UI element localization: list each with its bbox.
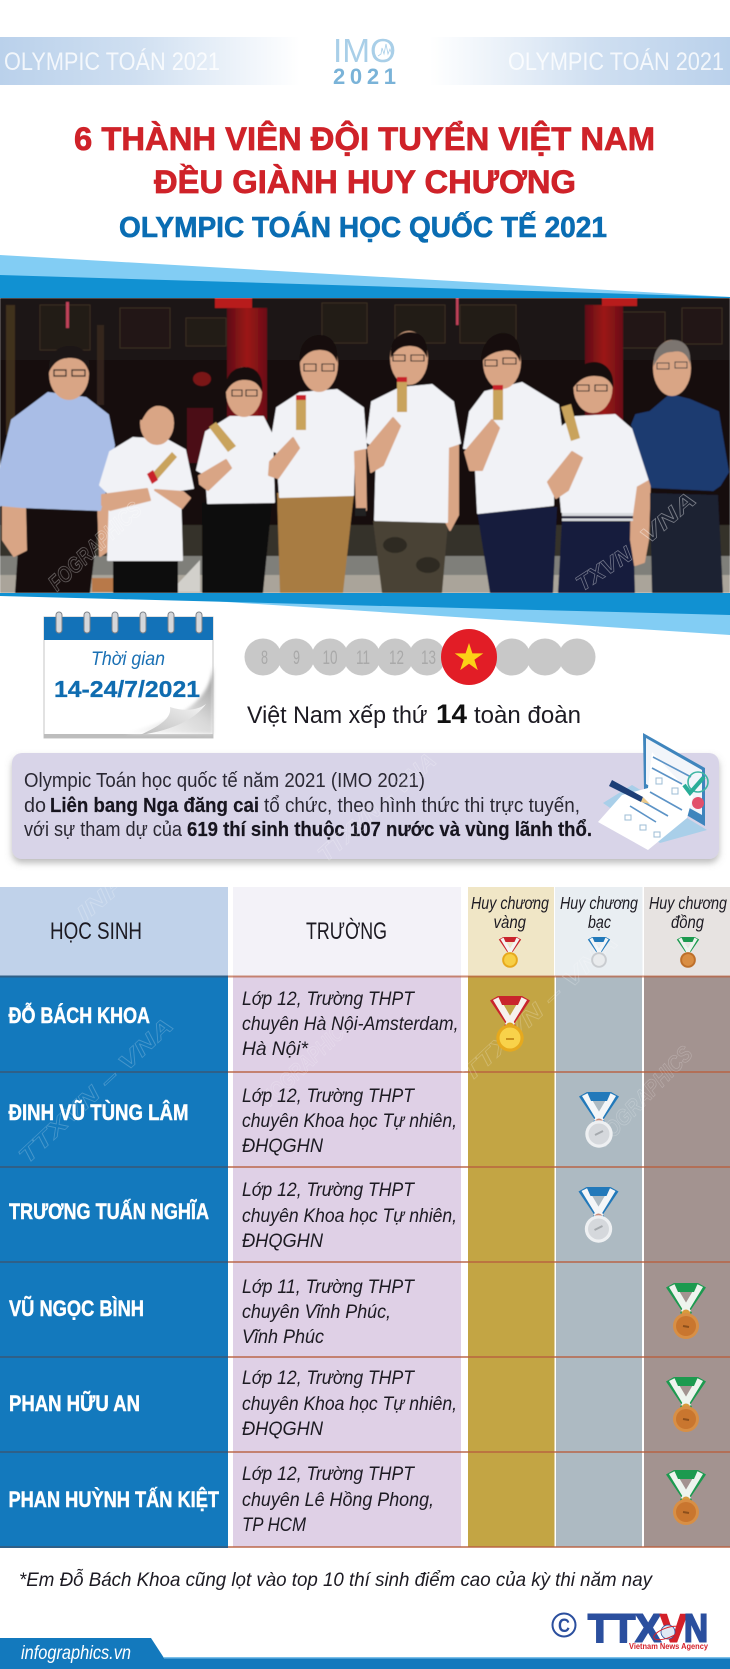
ranking statement: toàn đoàn — [474, 702, 581, 729]
person 8: man in navy shirt — [632, 340, 728, 593]
footer bar — [0, 1638, 730, 1669]
row 5: Phan Hữu An: chuyên Khoa học Tự nhiên, — [242, 1393, 457, 1415]
icon: gold medal — [490, 996, 530, 1052]
person 2: girl with bookmark — [100, 393, 193, 593]
row 3: Trương Tuấn Nghĩa — [9, 1179, 618, 1252]
TTXVN logo: V — [660, 1607, 687, 1651]
column heading: gold medal: Huy chương — [471, 893, 549, 913]
row 2: Đinh Vũ Tùng Lâm: ĐHQGHN — [242, 1135, 324, 1157]
row 4: Vũ Ngọc Bình: chuyên Vĩnh Phúc, — [242, 1301, 391, 1323]
photo watermarks: TXVN — [571, 541, 638, 596]
table watermarks: INF — [71, 871, 130, 927]
panel text: với sự tham dự của — [24, 819, 183, 841]
bottom wave — [0, 593, 730, 635]
ranking circles: 8 — [261, 648, 268, 669]
table watermarks: FOGRAPHICS — [591, 1041, 698, 1150]
icon: Vietnam flag circle — [441, 629, 497, 685]
row 1: Đỗ Bách Khoa: ĐỖ BÁCH KHOA — [8, 1002, 150, 1028]
panel text: Olympic Toán học quốc tế năm 2021 (IMO 2021) — [24, 770, 425, 792]
column heading: bronze medal — [649, 893, 727, 968]
row 4: Vũ Ngọc Bình: Lớp 11, Trường THPT — [242, 1276, 416, 1298]
row 2: Đinh Vũ Tùng Lâm: Lớp 12, Trường THPT — [242, 1085, 416, 1107]
icon: bronze medal — [666, 1377, 706, 1432]
calendar — [44, 612, 213, 738]
table watermarks — [13, 871, 698, 1169]
photo watermarks — [48, 494, 697, 592]
ranking statement — [247, 699, 581, 729]
top wave — [0, 255, 730, 298]
column heading: gold medal: vàng — [494, 912, 526, 932]
row 6: Phan Huỳnh Tấn Kiệt: TP HCM — [242, 1514, 307, 1536]
row 5: Phan Hữu An: ĐHQGHN — [242, 1418, 324, 1440]
photo background: temple — [0, 298, 730, 593]
icon: bronze medal — [666, 1283, 706, 1339]
person 1: man in light blue shirt — [0, 346, 114, 593]
panel text: Liên bang Nga đăng cai — [50, 795, 259, 817]
icon: bronze medal — [666, 1470, 706, 1525]
column heading: bronze medal: đồng — [671, 912, 704, 932]
ranking statement: 14 — [436, 699, 467, 729]
row 6: Phan Huỳnh Tấn Kiệt: PHAN HUỲNH TẤN KIỆT — [8, 1487, 219, 1512]
row 1: Đỗ Bách Khoa — [8, 988, 530, 1060]
IMO 2021 logo — [333, 32, 396, 89]
column heading: silver medal — [560, 893, 638, 968]
results table — [0, 871, 730, 1548]
title — [74, 121, 655, 244]
row 4: Vũ Ngọc Bình: Vĩnh Phúc — [242, 1326, 324, 1348]
table row rules — [0, 976, 730, 1548]
person 5: boy with camouflage trousers — [367, 332, 460, 593]
title: ĐỀU GIÀNH HUY CHƯƠNG — [154, 164, 576, 200]
row 5: Phan Hữu An: PHAN HỮU AN — [9, 1391, 140, 1416]
title: OLYMPIC TOÁN HỌC QUỐC TẾ 2021 — [119, 211, 607, 244]
row 3: Trương Tuấn Nghĩa: TRƯƠNG TUẤN NGHĨA — [9, 1199, 209, 1224]
footnote: *Em Đỗ Bách Khoa cũng lọt vào top 10 thí sinh điểm cao của kỳ thi năm nay — [19, 1568, 653, 1591]
column heading: gold medal — [471, 893, 549, 968]
IMO 2021 logo: IMO — [333, 32, 396, 69]
TTXVN logo: N — [684, 1607, 708, 1651]
table watermarks: FOGRAPHICS — [256, 1012, 358, 1111]
table column backgrounds — [0, 887, 730, 1547]
photo watermarks: FOGRAPHICS — [43, 497, 147, 596]
row 5: Phan Hữu An: Lớp 12, Trường THPT — [242, 1367, 416, 1389]
TTXVN logo — [552, 1607, 710, 1651]
row 3: Trương Tuấn Nghĩa: Lớp 12, Trường THPT — [242, 1179, 416, 1201]
panel watermark: TTXVN – VNA — [313, 748, 441, 867]
person 7: boy with striped belt — [546, 362, 652, 593]
ranking circles: 9 — [293, 648, 300, 669]
photo watermarks: VNA — [635, 487, 701, 549]
footer bar: infographics.vn — [21, 1643, 131, 1664]
icon: online exam laptop — [598, 733, 708, 850]
row 5: Phan Hữu An — [9, 1367, 706, 1440]
info panel — [12, 733, 719, 867]
calendar rings — [56, 612, 202, 633]
table watermarks: TTXVN – VNA — [13, 1013, 178, 1169]
column heading: silver medal: Huy chương — [560, 893, 638, 913]
person 6: boy with navy trousers — [464, 333, 562, 593]
calendar: Thời gian — [91, 649, 165, 670]
ranking circles: 11 — [356, 648, 370, 669]
row 4: Vũ Ngọc Bình: VŨ NGỌC BÌNH — [9, 1296, 144, 1321]
ranking circles — [244, 629, 596, 685]
calendar: 14-24/7/2021 — [54, 676, 200, 702]
row 6: Phan Huỳnh Tấn Kiệt: chuyên Lê Hồng Phong, — [242, 1489, 434, 1511]
table watermarks: TTXVN – VNA — [456, 929, 623, 1087]
top banner: OLYMPIC TOÁN 2021 — [4, 47, 220, 76]
panel text: 619 thí sinh thuộc 107 nước và vùng lãnh thổ. — [187, 819, 592, 841]
person 4: boy with khaki trousers — [269, 335, 366, 593]
ranking circles: 13 — [421, 648, 436, 669]
ranking statement: Việt Nam xếp thứ — [247, 702, 428, 729]
row 3: Trương Tuấn Nghĩa: chuyên Khoa học Tự nhiên, — [242, 1205, 457, 1227]
column heading: schools: TRƯỜNG — [306, 918, 387, 945]
column heading: silver medal: bạc — [588, 912, 611, 932]
row 3: Trương Tuấn Nghĩa: ĐHQGHN — [242, 1230, 324, 1252]
icon: silver medal — [579, 1092, 619, 1148]
TTXVN logo: Vietnam News Agency — [629, 1641, 708, 1651]
panel text — [24, 770, 592, 841]
column heading: students: HỌC SINH — [50, 918, 142, 945]
row 6: Phan Huỳnh Tấn Kiệt — [8, 1463, 706, 1536]
row 4: Vũ Ngọc Bình — [9, 1276, 706, 1348]
row 1: Đỗ Bách Khoa: Lớp 12, Trường THPT — [242, 988, 416, 1010]
panel text: tổ chức, theo hình thức thi trực tuyến, — [264, 795, 580, 817]
team photo — [0, 298, 730, 596]
TTXVN logo: TTX — [588, 1607, 661, 1651]
panel text: do — [24, 795, 46, 817]
row 2: Đinh Vũ Tùng Lâm: ĐINH VŨ TÙNG LÂM — [8, 1100, 188, 1125]
IMO 2021 logo: 2021 — [333, 64, 396, 89]
ranking circles: 10 — [322, 648, 338, 669]
top banner — [0, 37, 730, 85]
row 1: Đỗ Bách Khoa: chuyên Hà Nội-Amsterdam, — [242, 1013, 458, 1035]
icon: silver medal — [578, 1187, 618, 1243]
person 3: boy in white polo — [197, 367, 274, 593]
TTXVN logo: C — [558, 1616, 570, 1637]
row 1: Đỗ Bách Khoa: Hà Nội* — [242, 1038, 309, 1060]
title: 6 THÀNH VIÊN ĐỘI TUYỂN VIỆT NAM — [74, 121, 655, 157]
ranking circles: 12 — [389, 648, 404, 669]
row 6: Phan Huỳnh Tấn Kiệt: Lớp 12, Trường THPT — [242, 1463, 416, 1485]
row 2: Đinh Vũ Tùng Lâm: chuyên Khoa học Tự nhiên, — [242, 1110, 457, 1132]
row 2: Đinh Vũ Tùng Lâm — [8, 1085, 619, 1157]
